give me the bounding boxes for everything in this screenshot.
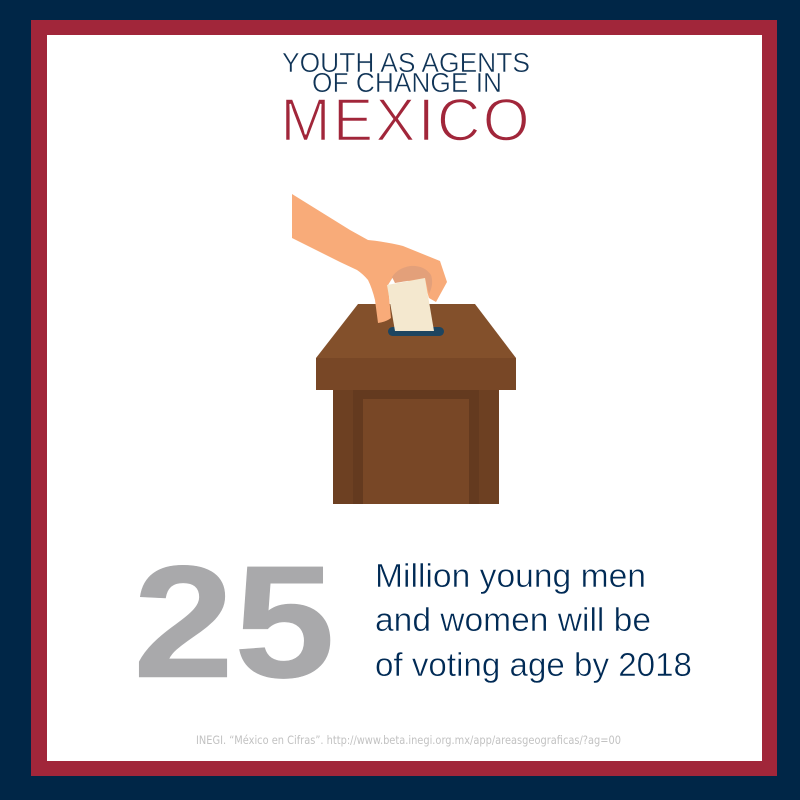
statistic description	[375, 557, 692, 683]
statistic description: of voting age by 2018	[375, 646, 692, 683]
ballot slot	[388, 327, 444, 336]
source citation: INEGI. “México en Cifras”. http://www.beta.inegi.org.mx/app/areasgeograficas/?ag=00	[196, 733, 621, 747]
title	[280, 47, 530, 154]
statistic description: Million young men	[375, 557, 646, 594]
hand	[292, 194, 447, 323]
box body	[333, 390, 499, 504]
title: OF CHANGE IN	[312, 67, 502, 98]
box lid front	[316, 358, 516, 390]
statistic description: and women will be	[375, 601, 651, 638]
ballot paper	[387, 278, 434, 331]
title: MEXICO	[280, 86, 530, 154]
box lid top	[316, 304, 516, 358]
finger shadow	[392, 266, 432, 294]
box front panel	[363, 399, 469, 504]
title: YOUTH AS AGENTS	[282, 47, 530, 78]
big number 25: 25	[133, 532, 335, 711]
icon: ballot box with hand	[292, 194, 516, 504]
box body inner shadow	[353, 390, 479, 504]
